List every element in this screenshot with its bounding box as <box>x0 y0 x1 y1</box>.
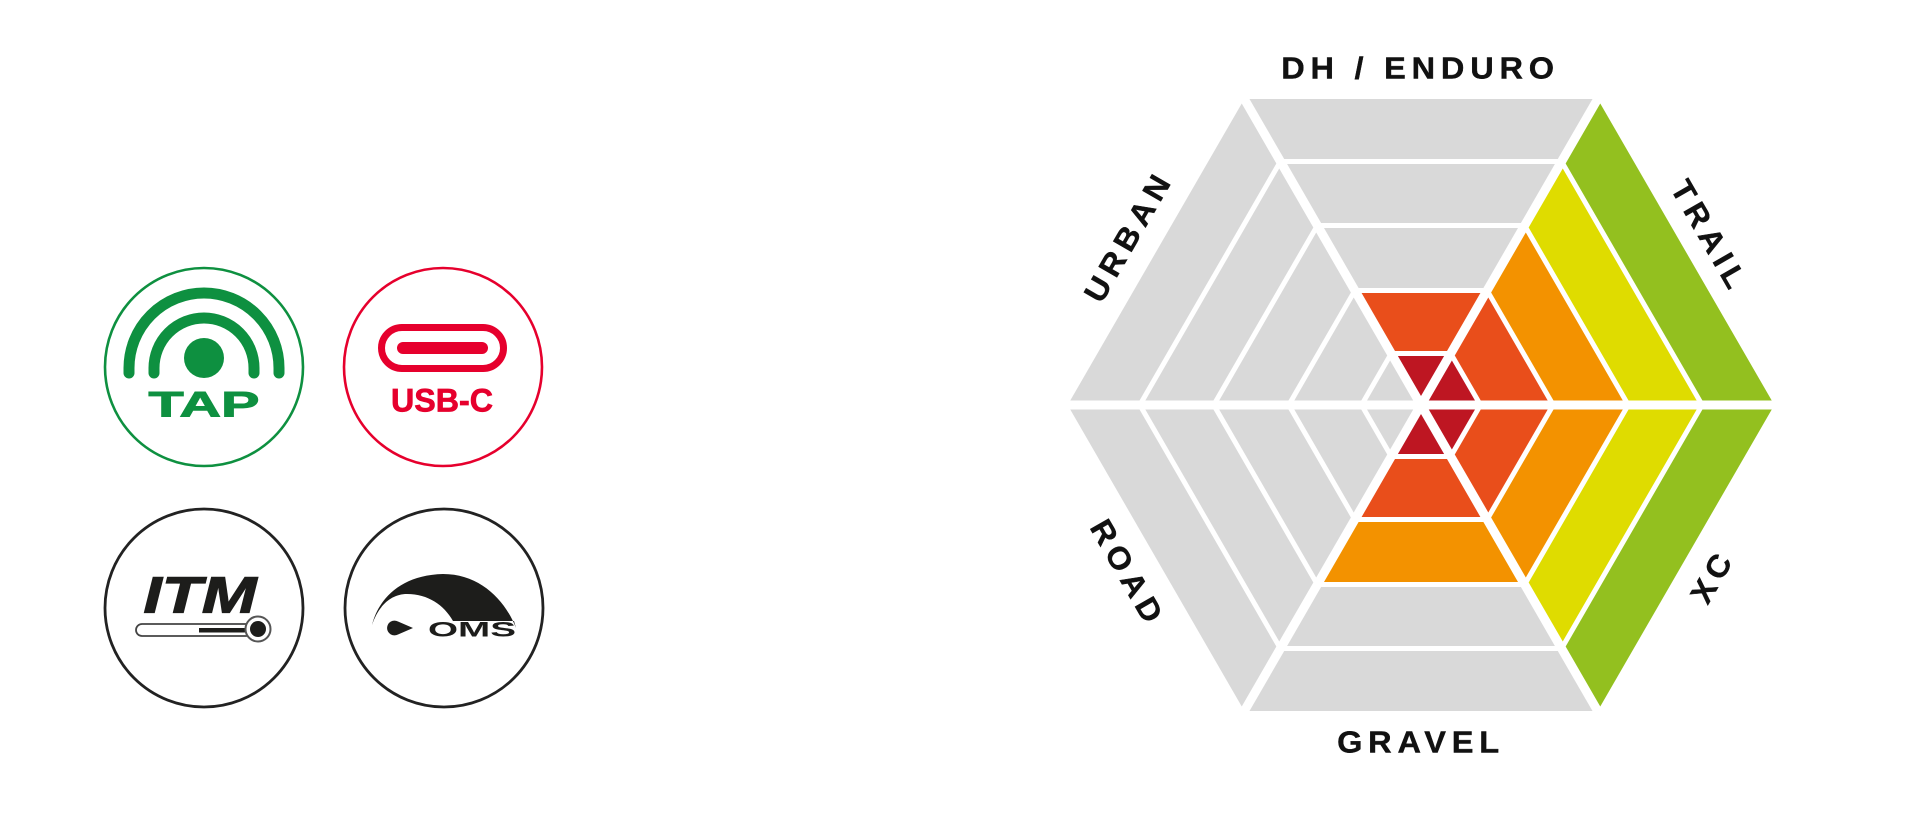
chart: riding category hexagon <box>1070 99 1772 711</box>
label: URBAN: URBAN <box>1077 164 1180 308</box>
icon: ITM badge <box>105 509 303 707</box>
label: TRAIL: TRAIL <box>1664 174 1756 299</box>
icon: OMS badge <box>345 509 543 707</box>
icon: USB-C badge: USB-C <box>391 382 493 418</box>
icon: OMS badge: OMS <box>428 618 516 642</box>
sector: Trail <box>1343 103 1772 549</box>
sector: DH / Enduro <box>1250 99 1592 396</box>
label: ROAD: ROAD <box>1083 513 1173 634</box>
sector: XC <box>1343 261 1772 707</box>
sector: Gravel <box>1250 414 1592 711</box>
label: XC: XC <box>1683 543 1742 609</box>
icon: TAP badge: TAP <box>148 386 260 424</box>
label: GRAVEL: GRAVEL <box>1337 724 1505 759</box>
icon: USB-C badge <box>344 268 542 466</box>
sector: Road <box>1070 261 1499 707</box>
icon: ITM badge: ITM <box>144 566 258 624</box>
sector: Urban <box>1070 103 1499 549</box>
icon: TAP badge <box>105 268 303 466</box>
label: DH / ENDURO: DH / ENDURO <box>1281 50 1560 85</box>
